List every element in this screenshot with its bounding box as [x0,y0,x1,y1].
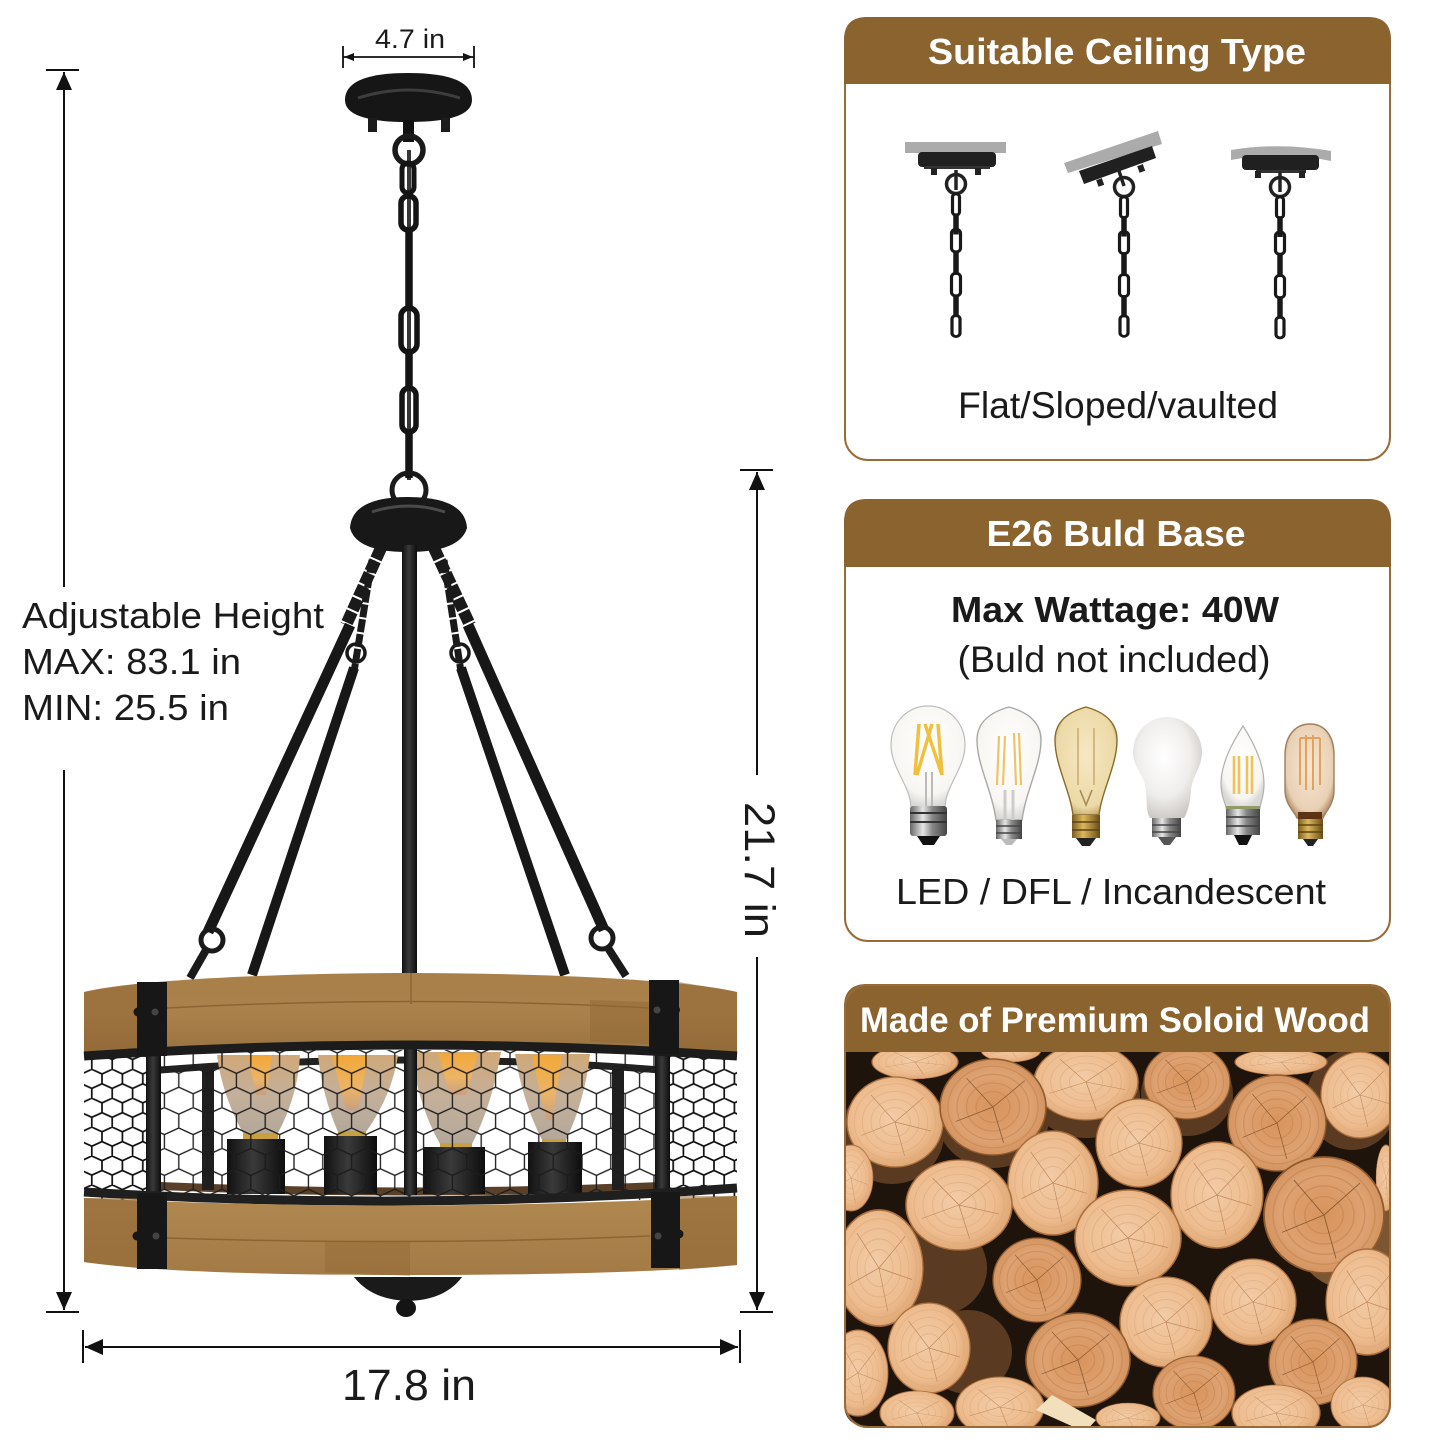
dimension: diameter 17.8 in [83,1330,740,1410]
heading: Made of Premium Soloid Wood [860,1001,1370,1040]
dimension: fixture height 21.7 in: 21.7 in [735,802,783,938]
heading: E26 Buld Base [986,513,1246,554]
cage posts [146,1055,670,1195]
dimension: fixture height 21.7 in [735,470,783,1312]
icon: frosted LED bulb [1133,717,1202,845]
panel: suitable ceiling type [844,17,1391,460]
dimension: diameter 17.8 in: 17.8 in [342,1361,476,1410]
panel: E26 bulb base [844,499,1391,941]
lower wood band [84,1196,737,1276]
caption: Flat/Sloped/vaulted [958,385,1278,426]
panel bottom border [845,985,1390,1427]
log faces [844,1052,1389,1426]
dimension: canopy width 4.7 in [343,24,474,68]
caption: LED / DFL / Incandescent [896,871,1326,912]
dimension: adjustable height arrow [46,70,79,1312]
lower hub [350,473,467,552]
chandelier [84,73,737,1317]
icon: vaulted ceiling mount [1231,146,1331,338]
panel header [844,17,1391,84]
metal straps with rivets [132,980,684,1269]
upper rim [84,1045,737,1056]
text: adjustable height: MIN: 25.5 in [22,687,229,728]
text: adjustable height: Adjustable Height [22,595,324,636]
chicken wire mesh [84,1050,737,1200]
bottom finial [354,1277,462,1317]
panel frame [845,500,1390,941]
text: adjustable height: MAX: 83.1 in [22,641,241,682]
lower rim [84,1188,737,1201]
drum cage interior [161,1056,655,1196]
photo: stacked logs [844,1052,1389,1426]
panel header [844,984,1391,1052]
arms and center rod [190,545,626,978]
hanging chain [401,150,417,480]
max wattage: Max Wattage: 40W [951,589,1279,630]
upper wood band [84,973,737,1052]
icon: sloped ceiling mount [1064,131,1162,336]
panel frame [845,985,1390,1427]
text: adjustable height [22,595,324,728]
panel: premium solid wood [828,984,1408,1441]
icon: flat ceiling mount [905,142,1006,337]
icon: candle LED bulb [1221,726,1264,845]
icon: amber ST-shape bulb [1055,707,1117,846]
icon: tubular amber bulb [1285,724,1334,846]
ceiling canopy [345,73,472,164]
bulb note: (Buld not included) [958,639,1270,680]
bulbs [217,1052,590,1194]
center rod through cage [404,1045,417,1195]
panel header [844,499,1391,567]
icon: A-shape LED filament bulb [891,706,965,845]
icon: ST-shape LED filament bulb [977,707,1041,845]
dimension: canopy width 4.7 in: 4.7 in [375,24,445,54]
panel frame [845,18,1390,460]
heading: Suitable Ceiling Type [928,31,1306,72]
